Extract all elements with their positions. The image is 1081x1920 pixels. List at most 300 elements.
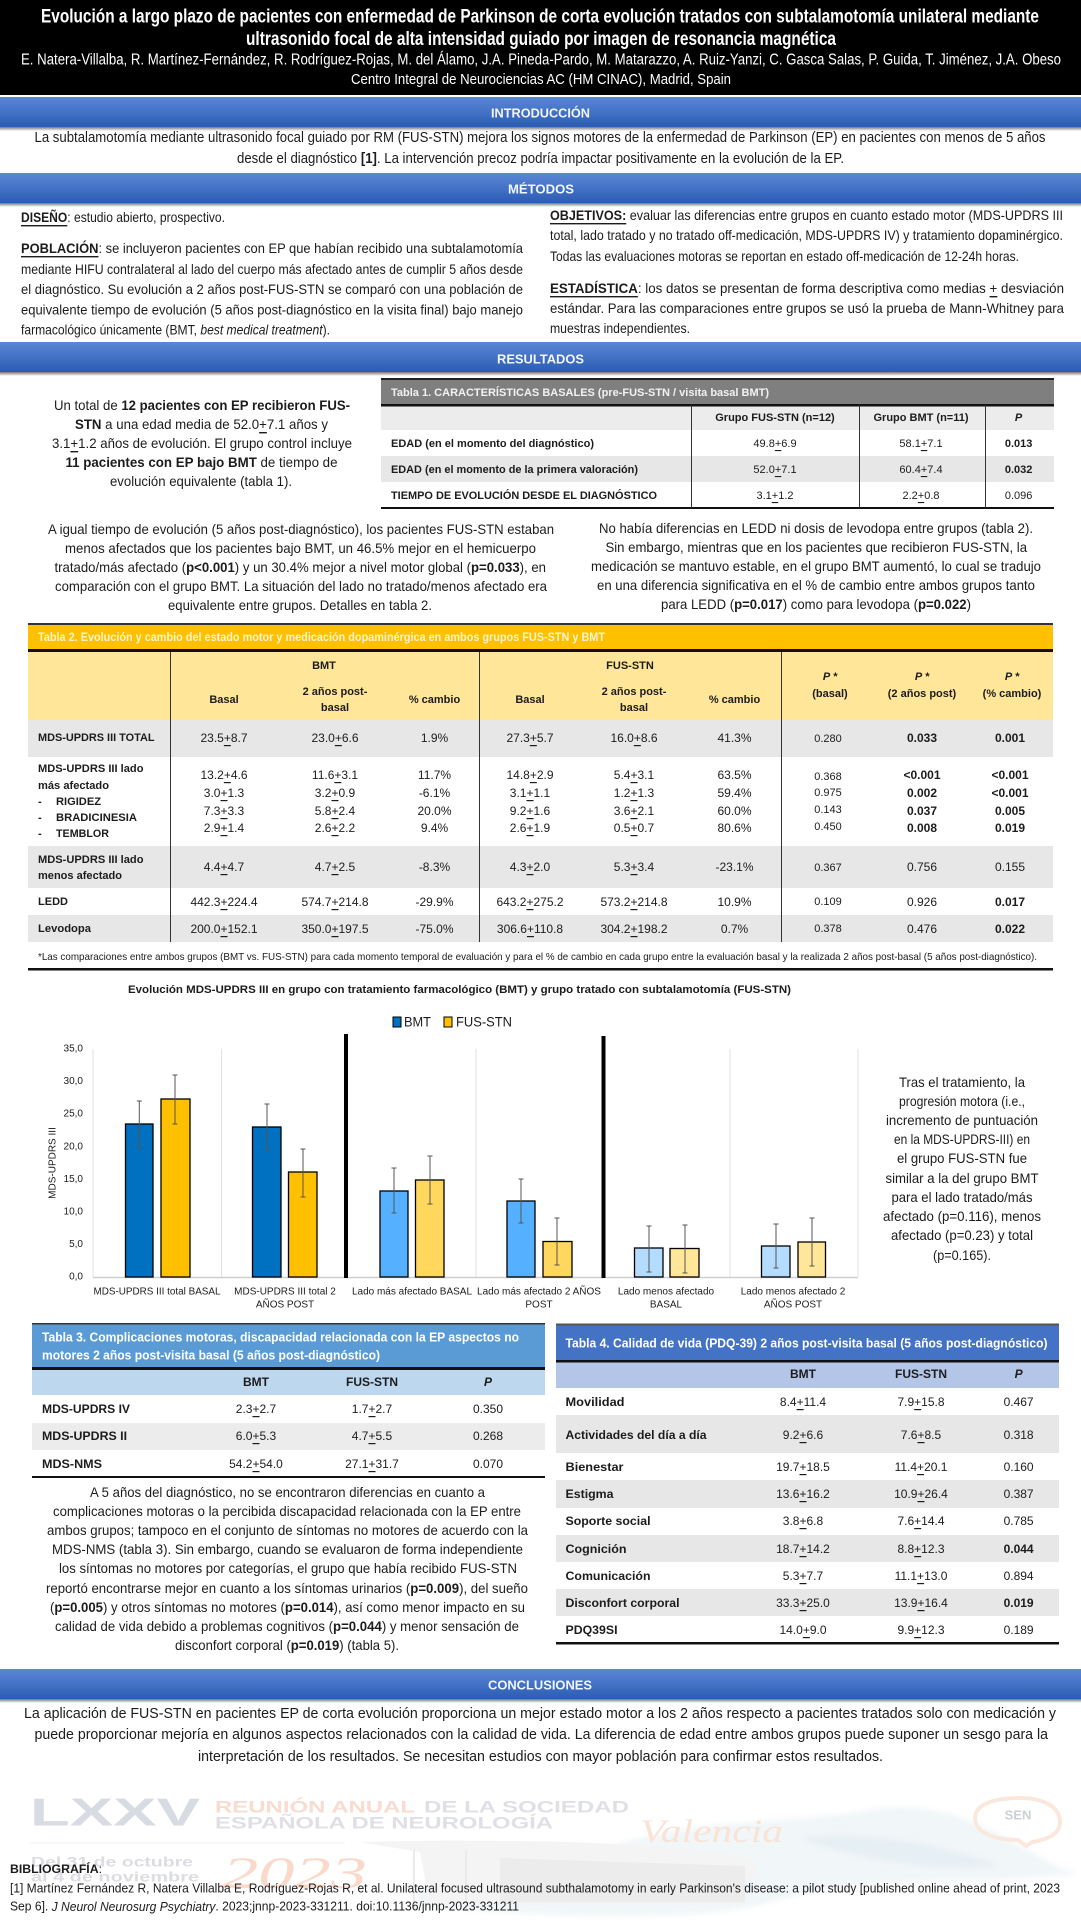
- table 4 rows: 0.785: [1004, 1514, 1034, 1528]
- y axis title: MDS-UPDRS III: [48, 1127, 58, 1199]
- table 3 title: Tabla 3. Complicaciones motoras, discapacidad relacionada con la EP aspectos no: [42, 1330, 519, 1344]
- table 2 p values: 0.017: [995, 895, 1025, 909]
- table 2 p values: 0.005: [995, 804, 1025, 818]
- table 3 rows: 2.3+2.7: [236, 1402, 277, 1416]
- y axis labels: 20,0: [64, 1141, 83, 1152]
- table 2 values: 0.5+0.7: [614, 821, 655, 835]
- footer watermark: congress artwork: ESPAÑOLA DE NEUROLOGÍA: [215, 1812, 553, 1832]
- table 2 header: basal: [321, 702, 349, 714]
- y axis labels: 10,0: [64, 1206, 83, 1218]
- table 3 header: BMT: [243, 1375, 270, 1389]
- text: medicación: medicación se mantuvo estable, en el grupo BMT aumentó, lo cual se tradujo: [591, 558, 1041, 574]
- table 4 rows: Disconfort corporal: [566, 1596, 680, 1610]
- text: progresión motora: afectado (p=0.116), menos: [883, 1208, 1041, 1224]
- footer watermark: congress artwork: al 4 de noviembre: [31, 1870, 200, 1884]
- table 3 header: P: [484, 1375, 493, 1389]
- table 2 values: 574.7+214.8: [301, 895, 369, 909]
- table 2 title: Tabla 2. Evolución y cambio del estado motor y medicación dopaminérgica en ambos grupos FUS-STN y BMT: [38, 632, 605, 644]
- table 4 rows: 8.8+12.3: [897, 1542, 945, 1556]
- text: comparación motora: equivalente entre grupos. Detalles en tabla 2.: [168, 597, 432, 613]
- table 4 rows: 0.044: [1004, 1542, 1034, 1556]
- text: progresión motora: similar a la del grupo BMT: [886, 1170, 1039, 1186]
- text: síntomas no motores: A 5 años del diagnóstico, no se encontraron diferencias en cuanto a: [90, 1484, 485, 1500]
- table 1 row labels: EDAD (en el momento del diagnóstico): [391, 438, 594, 450]
- text: conclusiones: [24, 1706, 1057, 1765]
- text: pacientes: 3.1+1.2 años de evolución. El grupo control incluye: [52, 435, 352, 451]
- table 4 rows: 0.387: [1004, 1487, 1034, 1501]
- table 2 row labels: -: [38, 828, 42, 840]
- table 4 rows: 5.3+7.7: [783, 1569, 824, 1583]
- table 4 rows: 11.1+13.0: [895, 1569, 948, 1583]
- table 2 header: Basal: [515, 694, 545, 706]
- table 2 p values: 0.476: [907, 922, 937, 936]
- table 2 row labels: LEDD: [38, 896, 68, 908]
- table 2 row labels: TEMBLOR: [56, 828, 109, 840]
- table 3 rows: 4.7+5.5: [352, 1429, 393, 1443]
- objetivos: [550, 207, 1063, 264]
- table 2 row labels: BRADICINESIA: [56, 812, 137, 824]
- text: medicación: No había diferencias en LEDD ni dosis de levodopa entre grupos (tabla 2).: [599, 520, 1033, 536]
- table 4 rows: Comunicación: [566, 1569, 650, 1583]
- separators: [344, 1034, 606, 1278]
- table 2 p values: 0.019: [995, 821, 1025, 835]
- table 2 footnote: *Las comparaciones entre ambos grupos (BMT vs. FUS-STN) para cada momento temporal de evaluación y para el % de cambio en cada grupo entre la evaluación basal y la realizada 2 años post-basal (5 años post-diagnóstico).: [38, 951, 1037, 963]
- text: progresión motora: (p=0.165).: [933, 1247, 991, 1263]
- error bars: [137, 1075, 815, 1273]
- table 2 p values: <0.001: [991, 786, 1029, 800]
- table 2 p values: 0.033: [907, 731, 937, 745]
- text: síntomas no motores: disconfort corporal (p=0.019) (tabla 5).: [175, 1637, 399, 1653]
- table 2 row labels: -: [38, 796, 42, 808]
- población: el diagnóstico. Su evolución a 2 años post-FUS-STN se comparó con una población de: [21, 281, 523, 297]
- y axis labels: 0,0: [69, 1272, 83, 1282]
- text: síntomas no motores: reportó encontrarse mejor en cuanto a los síntomas urinarios (p=0.009), del sueño: [46, 1580, 528, 1596]
- table 2 values: 5.3+3.4: [614, 860, 655, 874]
- table 1 values: 3.1+1.2: [756, 490, 794, 502]
- población: farmacológico únicamente (BMT, best medical treatment).: [21, 322, 330, 338]
- table 2 p values: 0.378: [814, 923, 842, 935]
- table 2 row labels: RIGIDEZ: [56, 796, 101, 808]
- table 2 values: 23.5+8.7: [200, 731, 248, 745]
- table 3: complicaciones motoras: [32, 1323, 545, 1478]
- text: conclusiones: interpretación de los resultados. Se necesitan estudios con mayor población para confirmar estos resultados.: [198, 1749, 883, 1765]
- table 2 p values: 0.367: [814, 862, 842, 874]
- text: progresión motora: progresión motora (i.e.,: [899, 1093, 1025, 1109]
- table 2 row labels: MDS-UPDRS III lado: [38, 763, 144, 775]
- table 1 values: 0.096: [1005, 490, 1032, 502]
- table 2 values: 3.6+2.1: [614, 804, 655, 818]
- table 1: características basales: [381, 378, 1054, 509]
- panel: métodos right: [550, 207, 1064, 336]
- table 4 rows: 13.6+16.2: [776, 1487, 830, 1501]
- x axis labels: Lado menos afectado: [618, 1286, 715, 1298]
- table 2 values: 41.3%: [717, 731, 752, 745]
- table 2 values: 2.6+2.2: [315, 821, 356, 835]
- footer watermark: congress artwork: Del 31 de octubre: [31, 1854, 194, 1870]
- table 3 rows: MDS-UPDRS IV: [42, 1402, 130, 1416]
- text: conclusiones: puede proporcionar mejoría en algunos aspectos relacionados con la calidad de vida. La diferencia de edad entre ambos grupos puede suponer un sesgo para la: [34, 1727, 1049, 1743]
- table 2 values: 200.0+152.1: [190, 922, 258, 936]
- table 2 row labels: -: [38, 812, 42, 824]
- footer watermark: congress artwork: [30, 1792, 1081, 1916]
- table 3 rows: [42, 1402, 503, 1471]
- footer watermark: congress artwork: DE LA SOCIEDAD: [424, 1798, 629, 1816]
- table 2 values: 2.9+1.4: [204, 821, 245, 835]
- table 2 values: -6.1%: [419, 786, 450, 800]
- text: medicación: [591, 520, 1041, 612]
- text: síntomas no motores: [46, 1484, 528, 1653]
- table 4 header: [790, 1367, 1024, 1381]
- table 3 title: motores 2 años post-visita basal (5 años post-diagnóstico): [42, 1348, 380, 1362]
- table 2: evolución y cambio: [28, 623, 1053, 970]
- table 4 rows: 13.9+16.4: [894, 1596, 948, 1610]
- table 2 values: 80.6%: [717, 821, 752, 835]
- table 1 values: 52.0+7.1: [753, 464, 797, 476]
- table 2 p values: [814, 731, 1029, 936]
- table 2 values: 3.0+1.3: [204, 786, 245, 800]
- panel: métodos left: [21, 208, 523, 338]
- heading: métodos: MÉTODOS: [508, 182, 574, 196]
- table 2 values: 23.0+6.6: [311, 731, 359, 745]
- table 2 values: 27.3+5.7: [506, 731, 554, 745]
- table 2 values: 304.2+198.2: [600, 922, 668, 936]
- table 1 values: 2.2+0.8: [902, 490, 940, 502]
- table 4 rows: Estigma: [566, 1487, 614, 1501]
- estadística: [550, 280, 1064, 336]
- población: mediante HIFU contralateral al lado del cuerpo más afectado antes de cumplir 5 años desde: [21, 261, 523, 277]
- x axis labels: Lado más afectado BASAL: [352, 1286, 472, 1298]
- table 4 rows: Actividades del día a día: [566, 1428, 707, 1442]
- table 2 values: 5.8+2.4: [315, 804, 356, 818]
- chart legend: [393, 1014, 512, 1030]
- table 2 values: 3.1+1.1: [510, 786, 551, 800]
- text: progresión motora: en la MDS-UPDRS-III) en: [894, 1131, 1030, 1147]
- table 2 values: 573.2+214.8: [600, 895, 668, 909]
- estadística: estándar. Para las comparaciones entre grupos se usó la prueba de Mann-Whitney para: [550, 300, 1064, 316]
- table 4 rows: Cognición: [566, 1542, 626, 1556]
- bibliography: [10, 1861, 1060, 1914]
- table 2 p values: 0.450: [814, 821, 842, 833]
- table 2 values: -75.0%: [415, 922, 454, 936]
- y axis labels: 25,0: [64, 1109, 83, 1120]
- text: progresión motora: afectado (p=0.23) y total: [891, 1227, 1033, 1243]
- text: pacientes: evolución equivalente (tabla 1).: [110, 473, 292, 489]
- table 2 values: 4.7+2.5: [315, 860, 356, 874]
- table 4 rows: 18.7+14.2: [776, 1542, 830, 1556]
- table 2 values: 13.2+4.6: [200, 768, 248, 782]
- text: conclusiones: La aplicación de FUS-STN en pacientes EP de corta evolución proporciona un mejor estado motor a los 2 años respecto a pacientes tratados solo con medicación y: [24, 1706, 1057, 1722]
- table 4 rows: [566, 1395, 1034, 1637]
- table 1 header: Grupo FUS-STN (n=12): [715, 412, 835, 424]
- footer watermark: congress artwork: 2023: [222, 1848, 367, 1898]
- table 4: calidad de vida: [556, 1324, 1059, 1644]
- table 2 p values: 0.926: [907, 895, 937, 909]
- table 2 values: 3.2+0.9: [315, 786, 356, 800]
- table 2 header: [209, 660, 1042, 714]
- heading: resultados: [0, 342, 1081, 376]
- table 1 values: 58.1+7.1: [899, 438, 943, 450]
- heading: introducción: INTRODUCCIÓN: [491, 106, 590, 120]
- table 3 header: FUS-STN: [346, 1375, 398, 1389]
- table 4 rows: 9.9+12.3: [897, 1623, 945, 1637]
- table 2 values: 59.4%: [717, 786, 752, 800]
- affiliation: Centro Integral de Neurociencias AC (HM CINAC), Madrid, Spain: [351, 72, 731, 88]
- table 4 header: FUS-STN: [895, 1367, 947, 1381]
- table 2 values: 442.3+224.4: [190, 895, 258, 909]
- table 2 values: 306.6+110.8: [497, 922, 563, 936]
- x axis labels: AÑOS POST: [256, 1298, 314, 1310]
- table 2 p values: <0.001: [991, 768, 1029, 782]
- table 2 header: (2 años post): [888, 688, 957, 700]
- heading: conclusiones: CONCLUSIONES: [488, 1678, 592, 1692]
- objetivos: Todas las evaluaciones motoras se reportan en estado off-medicación de 12-24h horas.: [550, 248, 1019, 264]
- table 2 values: 1.2+1.3: [614, 786, 655, 800]
- table 2 values: 5.4+3.1: [614, 768, 655, 782]
- table 2 row labels: menos afectado: [38, 870, 122, 882]
- table 2 row labels: [38, 732, 155, 935]
- text: medicación: en una diferencia significativa en el % de cambio entre ambos grupos tanto: [597, 577, 1035, 593]
- table 4 rows: Movilidad: [566, 1395, 624, 1409]
- text: síntomas no motores: calidad de vida debido a problemas cognitivos (p=0.044) y menor sensación de: [55, 1618, 519, 1634]
- table 1 row labels: TIEMPO DE EVOLUCIÓN DESDE EL DIAGNÓSTICO: [391, 489, 657, 502]
- text: pacientes: Un total de 12 pacientes con EP recibieron FUS-: [54, 397, 350, 413]
- chart legend: BMT: [404, 1014, 431, 1030]
- table 2 values: 11.6+3.1: [312, 768, 358, 782]
- table 2 values: 1.9%: [421, 731, 449, 745]
- table 4 rows: 9.2+6.6: [783, 1428, 824, 1442]
- table 4 rows: Soporte social: [566, 1514, 650, 1528]
- x axis labels: MDS-UPDRS III total BASAL: [94, 1286, 221, 1298]
- table 2 p values: 0.756: [907, 860, 937, 874]
- text: síntomas no motores: ambos grupos; tampoco en el conjunto de síntomas no motores de acuerdo con la: [47, 1522, 528, 1538]
- table 4 rows: 0.189: [1004, 1623, 1034, 1637]
- table 2 values: 11.7%: [418, 768, 451, 782]
- text: comparación motora: [48, 521, 554, 613]
- table 4 header: P: [1015, 1367, 1024, 1381]
- table 3 rows: 0.268: [473, 1429, 503, 1443]
- chart grid and axis: [93, 1049, 858, 1277]
- text: síntomas no motores: los síntomas no motores por categorías, el grupo que había recibido FUS-STN: [59, 1560, 517, 1576]
- table 4 rows: 0.160: [1004, 1460, 1034, 1474]
- table 4 title: Tabla 4. Calidad de vida (PDQ-39) 2 años post-visita basal (5 años post-diagnóstico): [566, 1336, 1048, 1350]
- table 4 rows: 0.467: [1004, 1395, 1034, 1409]
- y axis labels: [64, 1044, 83, 1282]
- table 1 values: 0.013: [1005, 438, 1032, 450]
- table 2 header: basal: [620, 702, 648, 714]
- text: comparación motora: menos afectados que los pacientes bajo BMT, un 46.5% mejor en el hemicuerpo: [65, 540, 536, 556]
- text: progresión motora: para el lado tratado/más: [892, 1189, 1032, 1205]
- table 2 header: BMT: [312, 660, 336, 672]
- footer watermark: congress artwork: REUNIÓN ANUAL: [215, 1798, 415, 1816]
- table 2 p values: 0.022: [995, 922, 1025, 936]
- table 4 rows: PDQ39SI: [566, 1623, 618, 1637]
- table 2 row labels: Levodopa: [38, 923, 92, 935]
- text: pacientes: [52, 397, 352, 489]
- table 2 header: 2 años post-: [303, 686, 368, 698]
- x axis labels: [94, 1284, 846, 1310]
- table 2 values: 7.3+3.3: [204, 804, 245, 818]
- bibliography: Sep 6]. J Neurol Neurosurg Psychiatry. 2023;jnnp-2023-331211. doi:10.1136/jnnp-2023-331211: [10, 1898, 519, 1914]
- text: comparación motora: A igual tiempo de evolución (5 años post-diagnóstico), los pacientes FUS-STN estaban: [48, 521, 554, 537]
- text: pacientes: 11 pacientes con EP bajo BMT de tiempo de: [66, 454, 338, 470]
- bibliography: BIBLIOGRAFÍA:: [10, 1861, 102, 1876]
- población: equivalente tiempo de evolución (5 años post-diagnóstico en la visita final) bajo manejo: [21, 302, 523, 318]
- table 3 rows: MDS-UPDRS II: [42, 1429, 127, 1443]
- table 2 header: FUS-STN: [606, 660, 654, 672]
- table 1 values: 49.8+6.9: [753, 438, 797, 450]
- text: síntomas no motores: MDS-NMS (tabla 3). Sin embargo, cuando se evaluaron de forma independiente: [52, 1541, 523, 1557]
- table 4 rows: 19.7+18.5: [776, 1460, 830, 1474]
- table 2 p values: 0.975: [814, 787, 842, 799]
- x axis labels: Lado menos afectado 2: [741, 1286, 846, 1298]
- table 2 values: 4.3+2.0: [510, 860, 551, 874]
- heading: introducción: [0, 97, 1081, 131]
- table 4 rows: 7.6+14.4: [897, 1514, 945, 1528]
- chart title: Evolución MDS-UPDRS III en grupo con tratamiento farmacológico (BMT) y grupo tratado con subtalamotomía (FUS-STN): [128, 984, 791, 996]
- table 2 values: 63.5%: [717, 768, 752, 782]
- chart legend: FUS-STN: [456, 1014, 512, 1030]
- y axis labels: 15,0: [64, 1174, 83, 1185]
- bars: [126, 1099, 826, 1277]
- text: comparación motora: tratado/más afectado (p<0.001) y un 30.4% mejor a nivel motor global (p=0.033), en: [54, 559, 546, 575]
- footer watermark: congress artwork: LXXV: [30, 1792, 200, 1834]
- table 1 header: [715, 412, 1023, 424]
- table 2 p values: 0.002: [907, 786, 937, 800]
- table 2 header: (basal): [812, 688, 848, 700]
- población: [21, 239, 523, 338]
- table 2 header: (% cambio): [983, 688, 1042, 700]
- table 3 title: [42, 1330, 519, 1362]
- title header: [0, 0, 1081, 95]
- table 2 row labels: más afectado: [38, 780, 109, 792]
- x axis labels: BASAL: [650, 1300, 683, 1310]
- table 2 p values: <0.001: [903, 768, 941, 782]
- table 2 header: % cambio: [709, 694, 760, 706]
- text: progresión motora: incremento de puntuación: [886, 1112, 1038, 1128]
- table 2 header: % cambio: [409, 694, 460, 706]
- table 2 p values: 0.037: [907, 804, 937, 818]
- table 2 p values: 0.155: [995, 860, 1025, 874]
- table 1 values: 0.032: [1005, 464, 1032, 476]
- x axis labels: MDS-UPDRS III total 2: [234, 1286, 336, 1298]
- table 4 rows: 7.6+8.5: [901, 1428, 942, 1442]
- x axis labels: Lado más afectado 2 AÑOS: [477, 1284, 601, 1298]
- table 2 p values: 0.001: [995, 731, 1025, 745]
- table 2 values: 350.0+197.5: [301, 922, 369, 936]
- table 2 values: 16.0+8.6: [610, 731, 658, 745]
- table 4 rows: 8.4+11.4: [780, 1395, 826, 1409]
- table 3 rows: 6.0+5.3: [236, 1429, 277, 1443]
- footer watermark: congress artwork: Valencia: [640, 1814, 783, 1850]
- población: POBLACIÓN: se incluyeron pacientes con EP que habían recibido una subtalamotomía: [21, 239, 523, 256]
- table 4 rows: 14.0+9.0: [779, 1623, 827, 1637]
- table 4 header: BMT: [790, 1367, 817, 1381]
- table 1 row labels: EDAD (en el momento de la primera valoración): [391, 464, 638, 476]
- diseño: DISEÑO: estudio abierto, prospectivo.: [21, 208, 225, 225]
- y axis labels: 5,0: [69, 1239, 83, 1250]
- table 1 row labels: [391, 438, 657, 502]
- text: progresión motora: el grupo FUS-STN fue: [897, 1150, 1027, 1166]
- estadística: ESTADÍSTICA: los datos se presentan de forma descriptiva como medias + desviación: [550, 280, 1064, 296]
- table 2 values: 2.6+1.9: [510, 821, 551, 835]
- y axis labels: 30,0: [64, 1076, 83, 1087]
- text: medicación: para LEDD (p=0.017) como para levodopa (p=0.022): [661, 596, 971, 612]
- table 3 rows: 1.7+2.7: [352, 1402, 393, 1416]
- estadística: muestras independientes.: [550, 320, 690, 336]
- table 3 rows: 0.070: [473, 1457, 503, 1471]
- table 2 values: 0.7%: [721, 922, 749, 936]
- table 2 header: P *: [1005, 671, 1020, 683]
- table 4 rows: 10.9+26.4: [894, 1487, 948, 1501]
- table 2 values: 9.4%: [421, 821, 449, 835]
- table 2 p values: 0.280: [814, 733, 842, 745]
- table 2 p values: 0.143: [814, 804, 842, 816]
- text: progresión motora: Tras el tratamiento, la: [899, 1074, 1025, 1090]
- x axis labels: POST: [525, 1300, 553, 1310]
- table 2 values: -29.9%: [415, 895, 454, 909]
- table 2 p values: 0.368: [814, 771, 842, 783]
- table 4 rows: 3.8+6.8: [783, 1514, 824, 1528]
- table 2 header: Basal: [209, 694, 239, 706]
- title: [41, 6, 1039, 50]
- table 4 rows: 0.894: [1004, 1569, 1034, 1583]
- table 2 values: 643.2+275.2: [496, 895, 564, 909]
- table 3 rows: 27.1+31.7: [345, 1457, 399, 1471]
- table 1 header: Grupo BMT (n=11): [873, 412, 969, 424]
- table 2 values: [190, 731, 754, 936]
- title: ultrasonido focal de alta intensidad guiado por imagen de resonancia magnética: [246, 29, 836, 50]
- table 4 rows: 33.3+25.0: [776, 1596, 830, 1610]
- table 2 header: 2 años post-: [602, 686, 667, 698]
- x axis labels: AÑOS POST: [764, 1298, 822, 1310]
- heading: resultados: RESULTADOS: [497, 352, 584, 366]
- text: progresión motora: [883, 1074, 1041, 1263]
- table 2 p values: 0.109: [814, 896, 842, 908]
- y axis labels: 35,0: [64, 1044, 83, 1054]
- table 1 header: P: [1015, 412, 1023, 424]
- text: introducción: desde el diagnóstico [1]. La intervención precoz podría impactar positivamente en la evolución de la EP.: [237, 151, 844, 167]
- table 2 header: P *: [915, 671, 930, 683]
- heading: métodos: [0, 173, 1081, 207]
- table 2 header: P *: [823, 671, 838, 683]
- table 2 values: -23.1%: [715, 860, 754, 874]
- table 2 values: 20.0%: [417, 804, 452, 818]
- table 1 values: [753, 438, 1032, 502]
- table 2 values: 4.4+4.7: [204, 860, 245, 874]
- text: pacientes: STN a una edad media de 52.0+7.1 años y: [75, 416, 328, 432]
- table 4 rows: Bienestar: [566, 1460, 624, 1474]
- text: medicación: Sin embargo, mientras que en los pacientes que recibieron FUS-STN, la: [606, 539, 1027, 555]
- table 2 values: 14.8+2.9: [506, 768, 554, 782]
- text: síntomas no motores: (p=0.005) y otros síntomas no motores (p=0.014), así como menor impacto en su: [50, 1599, 525, 1615]
- table 3 header: [243, 1375, 493, 1389]
- text: introducción: [34, 130, 1046, 167]
- table 2 values: 10.9%: [717, 895, 752, 909]
- footer watermark: congress artwork: SEN: [1005, 1808, 1031, 1822]
- table 2 values: 60.0%: [717, 804, 752, 818]
- table 1 values: 60.4+7.4: [899, 464, 943, 476]
- text: síntomas no motores: complicaciones motoras o la percibida discapacidad relacionada con la EP entre: [53, 1503, 521, 1519]
- table 2 row labels: MDS-UPDRS III TOTAL: [38, 732, 155, 744]
- text: comparación motora: comparación con el grupo BMT. La situación del lado no tratado/menos afectado era: [55, 578, 547, 594]
- table 2 values: 9.2+1.6: [510, 804, 551, 818]
- table 1 title: Tabla 1. CARACTERÍSTICAS BASALES (pre-FUS-STN / visita basal BMT): [391, 386, 769, 399]
- table 3 rows: 54.2+54.0: [229, 1457, 283, 1471]
- table 2 row labels: MDS-UPDRS III lado: [38, 854, 144, 866]
- table 3 rows: MDS-NMS: [42, 1457, 102, 1471]
- table 2 values: -8.3%: [419, 860, 450, 874]
- heading: conclusiones: [0, 1669, 1081, 1703]
